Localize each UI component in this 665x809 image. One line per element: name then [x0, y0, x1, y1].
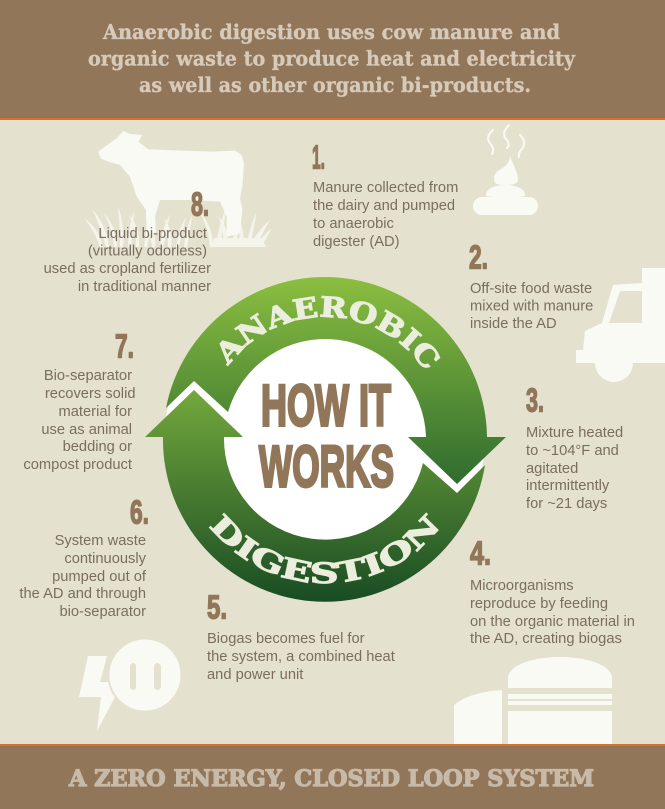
step 5: 5.	[207, 590, 227, 626]
step 3: for ~21 days	[526, 496, 607, 512]
step 6: bio-separator	[59, 604, 146, 620]
step 2	[469, 240, 593, 332]
step 7: bedding or	[63, 439, 132, 455]
step 6: 6.	[130, 494, 149, 532]
step 5: the system, a combined heat	[207, 649, 395, 665]
step 6: the AD and through	[19, 586, 146, 602]
icon: digester tanks	[454, 657, 612, 744]
step 6	[19, 494, 149, 620]
step 8: (virtually odorless)	[88, 244, 207, 260]
icon: power plug with lightning bolt	[79, 638, 182, 731]
step 3: agitated	[526, 461, 578, 477]
header text	[88, 20, 576, 97]
step 2: mixed with manure	[470, 298, 593, 314]
step 3: Mixture heated	[526, 425, 623, 441]
step 4: reproduce by feeding	[470, 596, 608, 612]
lower arrow ring	[145, 390, 485, 602]
step 1	[312, 140, 458, 250]
step 2: inside the AD	[470, 316, 557, 332]
ring label: anaerobic: ANAEROBIC	[220, 296, 440, 368]
step 8: Liquid bi-product	[98, 226, 207, 242]
step 4: on the organic material in	[470, 614, 635, 630]
step 4: Microorganisms	[470, 578, 574, 594]
footer text: A ZERO ENERGY, CLOSED LOOP SYSTEM	[68, 766, 594, 792]
step 8: 8.	[191, 186, 209, 224]
step 7: compost product	[23, 457, 132, 473]
step 7: recovers solid	[45, 386, 136, 402]
step 8	[44, 186, 211, 295]
center title: WORKS	[259, 434, 394, 500]
step 7: use as animal	[41, 422, 132, 438]
cycle diagram	[145, 277, 506, 602]
step 1: to anaerobic	[313, 216, 394, 232]
step 7: material for	[59, 404, 132, 420]
step 7: 7.	[115, 328, 134, 366]
footer banner	[0, 744, 665, 809]
step 3: intermittently	[526, 478, 610, 494]
step 7	[23, 328, 136, 473]
step 1: digester (AD)	[313, 234, 400, 250]
step 4: the AD, creating biogas	[470, 631, 622, 647]
step 4: 4.	[470, 536, 491, 572]
upper arrow ring	[166, 277, 506, 484]
step 4	[470, 536, 635, 647]
step 1: 1.	[312, 140, 325, 176]
icon: steaming manure	[473, 125, 538, 215]
step 5: Biogas becomes fuel for	[207, 631, 365, 647]
step 1: the dairy and pumped	[313, 198, 455, 214]
step 7: Bio-separator	[44, 368, 132, 384]
step 8: used as cropland fertilizer	[44, 261, 211, 277]
icon: delivery truck	[576, 268, 665, 382]
step 2: Off-site food waste	[470, 281, 592, 297]
icon: cow in grass	[84, 131, 272, 247]
header text: Anaerobic digestion uses cow manure and	[102, 20, 560, 44]
step 8: in traditional manner	[78, 279, 211, 295]
step 6: System waste	[55, 533, 146, 549]
step 3: 3.	[526, 382, 544, 420]
header text: organic waste to produce heat and electricity	[88, 46, 576, 70]
step 5	[207, 590, 395, 683]
step 2: 2.	[469, 240, 488, 276]
step 1: Manure collected from	[313, 180, 458, 196]
center title: HOW IT	[261, 374, 391, 438]
steam	[488, 125, 524, 157]
center title	[259, 374, 394, 500]
ring label: digestion: DIGESTION	[208, 512, 439, 584]
header banner	[0, 0, 665, 120]
step 6: continuously	[64, 551, 147, 567]
header text: as well as other organic bi-products.	[139, 73, 531, 97]
step 5: and power unit	[207, 667, 303, 683]
step 3: to ~104°F and	[526, 443, 619, 459]
step 3	[526, 382, 623, 512]
step 6: pumped out of	[52, 569, 147, 585]
